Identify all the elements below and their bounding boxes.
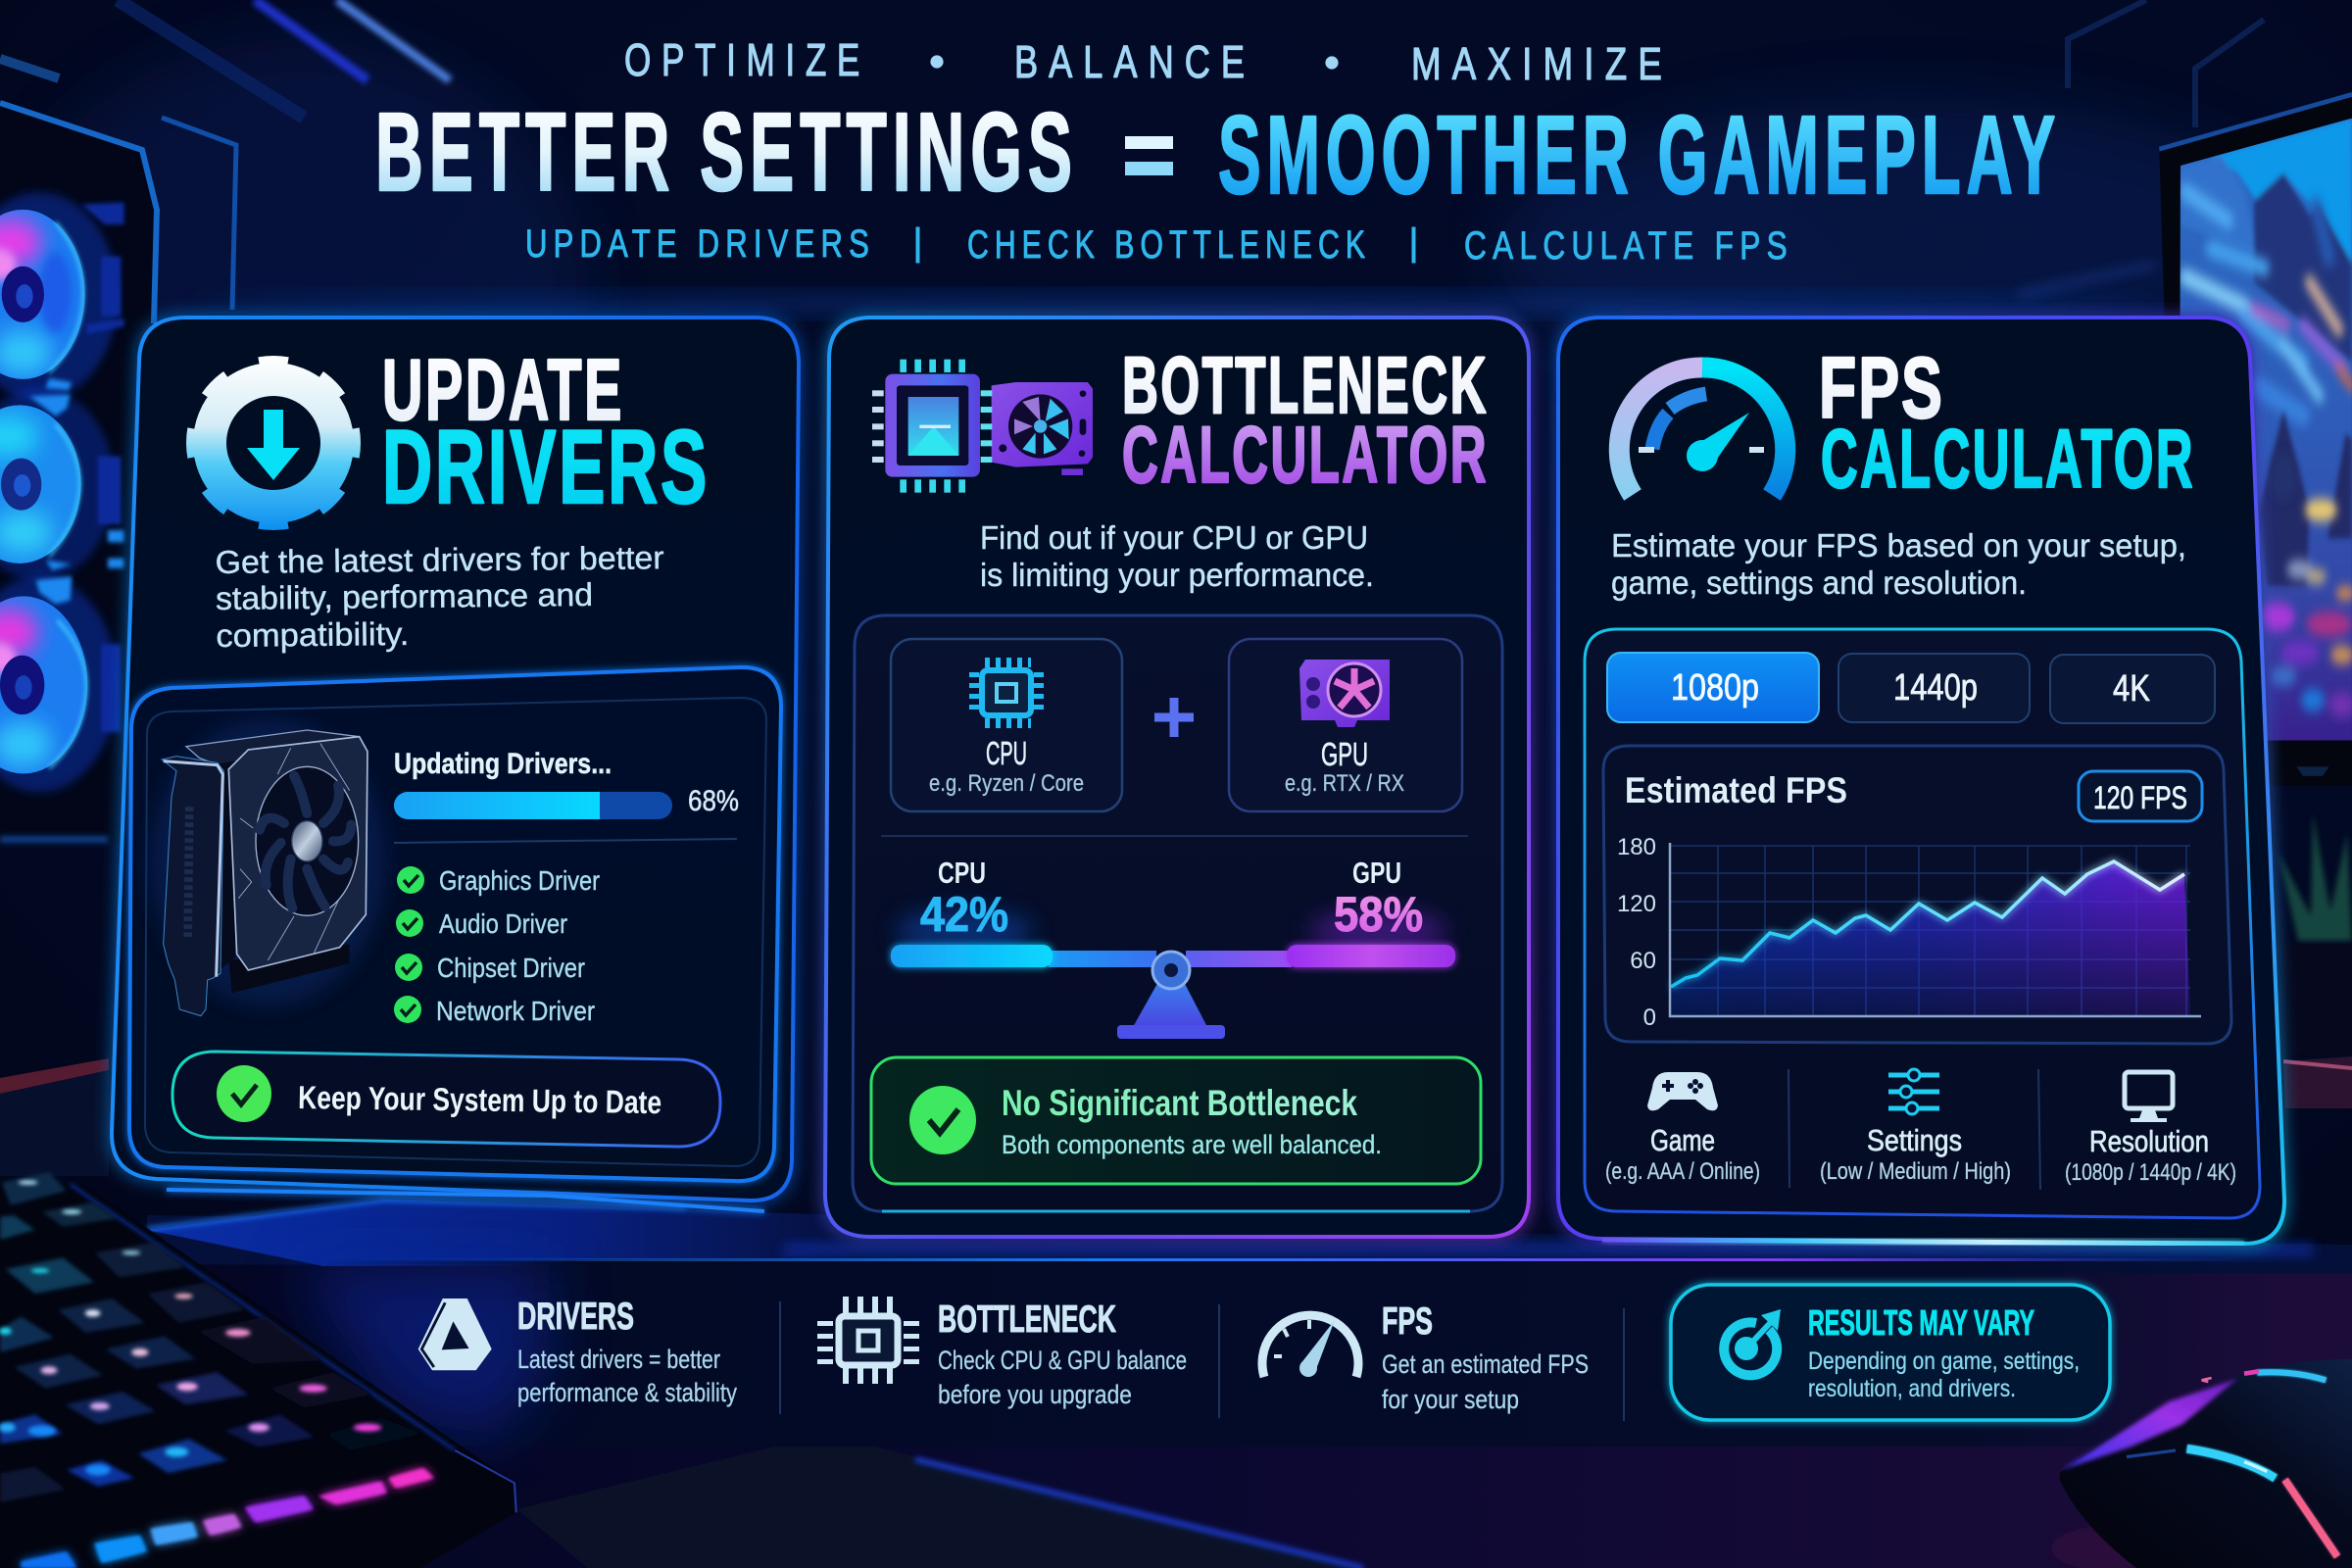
stat: gpu 58%	[1309, 856, 1446, 953]
line chart: 120	[1617, 891, 1656, 917]
header: subtitle: CHECK BOTTLENECK	[967, 223, 1371, 267]
feature: game	[1605, 1072, 1760, 1185]
driver checklist	[394, 865, 600, 1026]
panel title: update drivers: DRIVERS	[382, 408, 710, 525]
panel: fps inner card	[1585, 629, 2260, 1218]
chart heading: Estimated FPS	[1625, 770, 1847, 810]
callout: results may vary: RESULTS MAY VARY	[1808, 1302, 2034, 1343]
line chart: 180	[1617, 834, 1656, 860]
card: cpu	[891, 639, 1122, 811]
panel: driver progress card	[129, 667, 781, 1181]
text: update drivers description	[215, 539, 665, 654]
button: 4K	[2050, 655, 2215, 723]
header: subtitle: CALCULATE FPS	[1464, 224, 1793, 268]
card: gpu: e.g. RTX / RX	[1285, 770, 1404, 797]
footer item: fps: FPS	[1382, 1300, 1433, 1343]
header: tagline: OPTIMIZE	[624, 34, 870, 85]
card: cpu: e.g. Ryzen / Core	[929, 770, 1084, 797]
callout: keep system up to date: Keep Your System Up to Date	[298, 1079, 662, 1120]
icon: cpu and gpu	[872, 360, 1093, 493]
footer item: bottleneck: BOTTLENECK	[938, 1298, 1116, 1341]
text: update drivers description: stability, performance and	[216, 576, 593, 616]
mouse	[2051, 1359, 2352, 1568]
progress bar	[394, 792, 672, 819]
panel: bottleneck inner card	[853, 615, 1502, 1211]
callout: results may vary: Depending on game, settings,	[1808, 1348, 2080, 1375]
button: 1440p: 1440p	[1893, 667, 1978, 709]
mouse pad	[517, 1444, 1363, 1568]
badge: 120 fps	[2079, 771, 2202, 821]
icon: speedometer	[1619, 368, 1786, 495]
feature: resolution	[2065, 1072, 2236, 1186]
text: bottleneck description: is limiting your performance.	[980, 557, 1374, 593]
header: tagline: MAXIMIZE	[1411, 38, 1673, 89]
plant and shelf	[2278, 813, 2352, 1108]
stat: cpu 42%: 42%	[920, 887, 1008, 942]
panel title: update drivers	[382, 341, 710, 525]
panel title: bottleneck calculator	[1122, 341, 1489, 500]
monitor with game wallpaper	[2159, 92, 2352, 786]
footer item: bottleneck	[825, 1298, 1187, 1409]
panel: estimated fps chart	[1603, 746, 2231, 1044]
header: tagline	[624, 34, 1673, 89]
fan 3	[0, 594, 88, 774]
text: bottleneck description	[980, 519, 1374, 593]
panel title: bottleneck calculator: CALCULATOR	[1122, 411, 1489, 500]
feature: game: (e.g. AAA / Online)	[1605, 1158, 1760, 1185]
image: graphics card	[150, 718, 385, 1016]
icon: plus	[1154, 698, 1194, 737]
callout: no significant bottleneck: Both components are well balanced.	[1002, 1130, 1382, 1159]
line chart: 60	[1630, 948, 1656, 974]
footer item: drivers: DRIVERS	[517, 1296, 634, 1338]
main title	[375, 90, 2061, 217]
header: subtitle	[525, 222, 1793, 268]
panel: bottleneck calculator	[825, 318, 1529, 1237]
line chart	[1617, 834, 2201, 1031]
callout: keep system up to date	[172, 1052, 720, 1147]
chart: balance scale	[891, 945, 1455, 1039]
text: fps description: Estimate your FPS based on your setup,	[1611, 527, 2186, 564]
line chart: 0	[1643, 1004, 1656, 1031]
icon: gear with download arrow	[196, 366, 351, 520]
callout: no significant bottleneck: No Significant Bottleneck	[1002, 1083, 1357, 1123]
driver checklist: Network Driver	[436, 996, 595, 1026]
button: 1440p	[1838, 654, 2030, 722]
feature: settings	[1820, 1069, 2011, 1185]
card: gpu: GPU	[1321, 736, 1368, 772]
footer item: drivers: Latest drivers = better	[517, 1345, 720, 1374]
button: 1080p	[1607, 653, 1819, 722]
stat: gpu 58%: 58%	[1334, 887, 1423, 942]
panel title: update drivers: UPDATE	[382, 341, 624, 438]
panel title: bottleneck calculator: BOTTLENECK	[1122, 341, 1489, 430]
progress label: Updating Drivers...	[394, 748, 612, 780]
feature: settings: (Low / Medium / High)	[1820, 1158, 2011, 1185]
badge: 120 fps: 120 FPS	[2093, 780, 2187, 815]
text: update drivers description: compatibility.	[216, 615, 410, 654]
progress percent: 68%	[688, 785, 739, 817]
driver checklist: Graphics Driver	[439, 865, 600, 896]
footer item: fps	[1262, 1300, 1589, 1414]
footer item: bottleneck: before you upgrade	[938, 1380, 1132, 1409]
text: bottleneck description: Find out if your CPU or GPU	[980, 519, 1368, 556]
driver checklist: Chipset Driver	[437, 953, 585, 983]
header: tagline: BALANCE	[1014, 36, 1255, 87]
panel: fps calculator	[1558, 318, 2284, 1244]
fan 2	[0, 405, 88, 564]
card: cpu: CPU	[986, 735, 1027, 771]
text: fps description	[1611, 527, 2186, 601]
panel: update drivers	[112, 318, 799, 1211]
callout: results may vary	[1671, 1285, 2110, 1420]
main title: BETTER SETTINGS	[375, 90, 1078, 214]
footer item: fps: Get an estimated FPS	[1382, 1349, 1589, 1379]
feature: resolution: Resolution	[2089, 1124, 2209, 1158]
feature: resolution: (1080p / 1440p / 4K)	[2065, 1159, 2236, 1186]
header: subtitle: UPDATE DRIVERS	[525, 222, 875, 266]
button: 1080p: 1080p	[1671, 667, 1759, 709]
panel title: fps calculator	[1819, 339, 2195, 505]
keyboard	[0, 1172, 516, 1568]
footer strip	[294, 1258, 2254, 1446]
footer item: drivers: performance & stability	[517, 1378, 737, 1407]
stat: cpu 42%: CPU	[938, 856, 986, 890]
stat: gpu 58%: GPU	[1352, 856, 1401, 890]
feature: settings: Settings	[1867, 1123, 1962, 1157]
feature: game: Game	[1650, 1123, 1715, 1157]
panel title: fps calculator: FPS	[1819, 339, 1944, 436]
stat: cpu 42%	[896, 856, 1033, 953]
callout: results may vary: resolution, and drivers.	[1808, 1375, 2016, 1402]
fan 1	[0, 209, 88, 380]
footer item: fps: for your setup	[1382, 1385, 1519, 1414]
footer item: drivers	[418, 1296, 737, 1407]
button: 4K: 4K	[2113, 668, 2150, 710]
card: gpu	[1229, 639, 1462, 811]
pc case with rgb fans	[0, 0, 450, 1176]
driver checklist: Audio Driver	[439, 908, 567, 939]
footer item: bottleneck: Check CPU & GPU balance	[938, 1346, 1187, 1375]
callout: no significant bottleneck	[871, 1057, 1481, 1184]
text: fps description: game, settings and resolution.	[1611, 564, 2027, 601]
text: update drivers description: Get the latest drivers for better	[215, 539, 664, 580]
